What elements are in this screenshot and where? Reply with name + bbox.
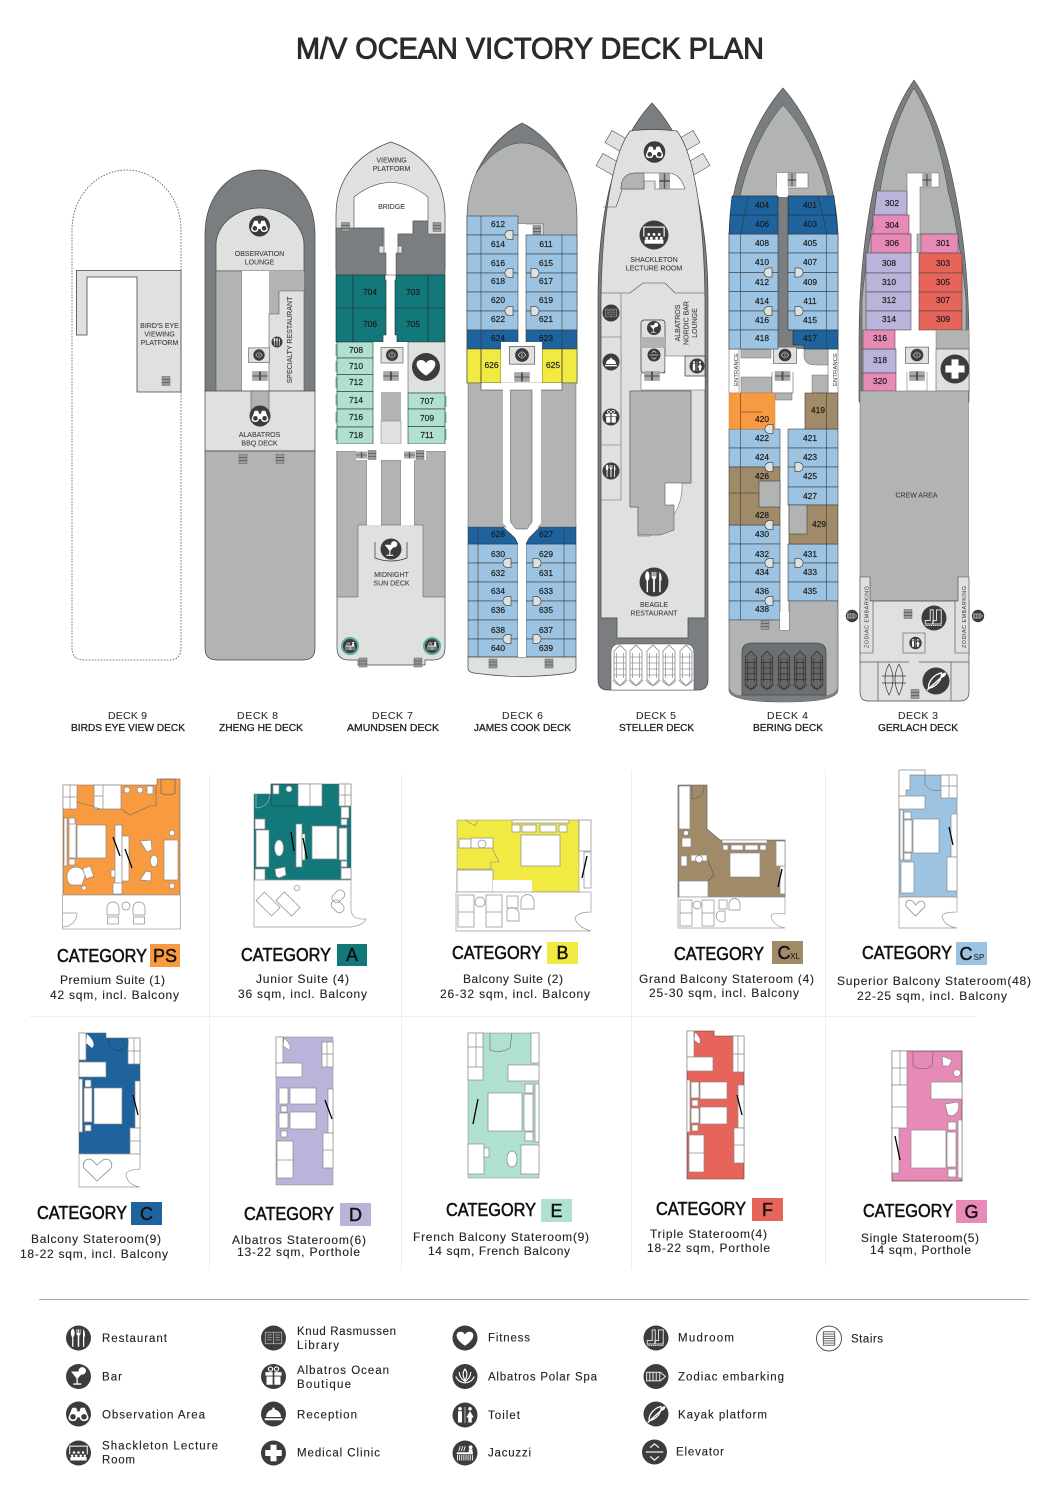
cabins: category C and B deck 6 xyxy=(467,330,577,544)
cabin numbers: deck 6: 623 xyxy=(539,333,553,343)
icon: kayak platform xyxy=(922,668,950,694)
heading: category F: CATEGORY xyxy=(656,1199,746,1219)
deck labels: DECK 8 xyxy=(237,710,278,722)
deck labels: STELLER DECK xyxy=(619,722,694,734)
panel: deck 7 plan xyxy=(336,142,446,667)
cabin numbers: deck 6: 640 xyxy=(491,643,505,653)
legend: bar xyxy=(66,1364,122,1389)
heading: category PS: CATEGORY xyxy=(57,946,147,966)
description: C SP: 22-25 sqm, incl. Balcony xyxy=(857,989,1007,1003)
description: F: Triple Stateroom(4) xyxy=(650,1227,767,1241)
legend: boutique xyxy=(261,1364,389,1391)
cabin numbers: deck 4: 411 xyxy=(803,296,817,306)
deck labels: BIRDS EYE VIEW DECK xyxy=(71,722,185,734)
panel: deck 5 plan: LOUNGE xyxy=(692,308,699,338)
description: D xyxy=(232,1233,366,1259)
legend: zodiac embarking xyxy=(644,1364,784,1389)
panel: deck 8 plan: LOUNGE xyxy=(245,259,275,266)
door markers: deck 4 xyxy=(764,268,803,606)
description: A: 36 sqm, incl. Balcony xyxy=(238,987,367,1001)
panel: category PS xyxy=(50,779,180,1002)
cabin numbers: deck 6: 624 xyxy=(491,333,505,343)
deck labels: DECK 4 xyxy=(767,710,808,722)
panel: deck 6 plan xyxy=(467,123,577,676)
icon: lecture room xyxy=(640,220,668,250)
legend: reception xyxy=(261,1402,357,1426)
icons: deck 5 side column xyxy=(602,304,620,480)
badge: G xyxy=(956,1200,987,1223)
cabins: category C XL xyxy=(729,393,838,544)
description: F: 18-22 sqm, Porthole xyxy=(647,1241,770,1255)
panel: deck 3 plan: ZODIAC EMBARKING xyxy=(864,586,870,648)
heading: category C SP: CATEGORY xyxy=(862,943,952,963)
cabin numbers: deck 4: 427 xyxy=(803,491,817,501)
cabin numbers: deck 6: 627 xyxy=(539,529,553,539)
deck labels xyxy=(71,710,958,734)
description: PS: Premium Suite (1) xyxy=(60,973,165,987)
cabin numbers: deck 3: 316 xyxy=(873,333,887,343)
cabin numbers: deck 4: 430 xyxy=(755,529,769,539)
cabin numbers: deck 3: 310 xyxy=(882,277,896,287)
cabin numbers: deck 7: 718 xyxy=(349,430,363,440)
legend: stairs: Stairs xyxy=(851,1334,883,1346)
icon: medical clinic xyxy=(940,354,970,384)
icon: restaurant xyxy=(640,568,668,596)
legend: toilet: Toilet xyxy=(488,1410,521,1422)
cabins: category C deck 4 xyxy=(729,196,838,349)
panel: category A xyxy=(238,784,367,1001)
badge: F: F xyxy=(762,1200,773,1220)
badge: B: B xyxy=(556,943,569,963)
cabin numbers: deck 3: 307 xyxy=(936,295,950,305)
legend: spa: Albatros Polar Spa xyxy=(488,1372,598,1384)
badge: PS: PS xyxy=(153,946,177,966)
floor plan: PS xyxy=(62,779,180,929)
description: C SP xyxy=(837,974,1031,1003)
panel: category C xyxy=(20,1033,168,1261)
heading: category G: CATEGORY xyxy=(863,1201,953,1221)
legend: library: Knud Rasmussen xyxy=(297,1326,396,1338)
panel: deck 8 plan: ALABATROS xyxy=(239,432,281,439)
legend: library xyxy=(261,1326,396,1352)
description: C xyxy=(20,1232,168,1261)
cabin numbers: deck 7: 711 xyxy=(420,430,434,440)
cabin numbers: deck 3: 318 xyxy=(873,355,887,365)
badge: G: G xyxy=(964,1202,979,1222)
legend: lecture room xyxy=(66,1440,218,1466)
cabins: category C superior deck 6 xyxy=(467,216,577,657)
cabin numbers: deck 6: 618 xyxy=(491,276,505,286)
cabin numbers: deck 6: 625 xyxy=(546,360,560,370)
panel: category B xyxy=(440,820,591,1001)
panel: category C SP xyxy=(837,770,1031,1003)
crew area: CREW AREA xyxy=(895,492,938,500)
panel: deck 7 plan: BRIDGE xyxy=(378,204,405,211)
cabin numbers: deck 4: 429 xyxy=(812,519,826,529)
legend: boutique: Boutique xyxy=(297,1379,351,1391)
cabin numbers: deck 4: 426 xyxy=(755,471,769,481)
kayaks xyxy=(882,664,906,695)
deck labels: DECK 3 xyxy=(898,710,938,722)
cabin numbers: deck 3: 312 xyxy=(882,295,896,305)
legend: spa xyxy=(452,1364,598,1389)
badge: D xyxy=(340,1203,371,1226)
legend: stairs xyxy=(816,1326,883,1351)
cabin numbers: deck 4: 422 xyxy=(755,433,769,443)
panel: deck 3 plan: ZODIAC EMBARKING xyxy=(962,586,968,648)
panel: deck 4 plan: ENTRANCE xyxy=(734,353,740,386)
heading: category E: CATEGORY xyxy=(446,1200,536,1220)
cabin numbers: deck 6: 631 xyxy=(539,568,553,578)
cabin numbers: deck 6: 629 xyxy=(539,549,553,559)
panel: deck 9 plan: PLATFORM xyxy=(141,340,178,347)
floor plan: A xyxy=(254,784,366,927)
lifeboats xyxy=(613,645,693,686)
description: C XL: Grand Balcony Stateroom (4) xyxy=(639,972,814,986)
deck labels: DECK 6 xyxy=(502,710,543,722)
description: E: 14 sqm, French Balcony xyxy=(428,1244,570,1258)
icon: restaurant xyxy=(272,336,282,348)
door markers: deck 6 xyxy=(503,230,541,644)
deck labels: AMUNDSEN DECK xyxy=(347,722,439,734)
cabin numbers: deck 6: 638 xyxy=(491,625,505,635)
cabin numbers: deck 6: 611 xyxy=(539,239,553,249)
cabin numbers: deck 4: 404 xyxy=(755,200,769,210)
floor plan: C XL xyxy=(678,785,785,928)
cabins: category F deck 3 xyxy=(919,253,962,330)
cabin numbers: deck 3: 303 xyxy=(936,258,950,268)
cabin numbers: deck 4: 407 xyxy=(803,257,817,267)
legend: kayak platform: Kayak platform xyxy=(678,1410,767,1422)
description: C: Balcony Stateroom(9) xyxy=(31,1232,161,1246)
cabin numbers: deck 4: 408 xyxy=(755,238,769,248)
cabin numbers: deck 4: 431 xyxy=(803,549,817,559)
legend: restaurant: Restaurant xyxy=(102,1333,168,1345)
cabin numbers: deck 3: 320 xyxy=(873,376,887,386)
cabin numbers: deck 4: 423 xyxy=(803,452,817,462)
panel: deck 7 plan: VIEWING xyxy=(376,158,407,164)
cabin numbers: deck 7: 716 xyxy=(349,412,363,422)
floor plan: C xyxy=(79,1033,140,1187)
description: A: Junior Suite (4) xyxy=(256,972,349,986)
cabin numbers: deck 6: 634 xyxy=(491,586,505,596)
badge: C SP: SP xyxy=(974,953,984,962)
legend: mudroom: Mudroom xyxy=(678,1332,734,1344)
panel: deck 4 plan: ENTRANCE xyxy=(833,353,839,386)
badge: D: D xyxy=(349,1205,362,1225)
cabins: category A xyxy=(336,275,445,342)
panel: deck 8 plan: BBQ DECK xyxy=(241,440,278,447)
cabin numbers: deck 6: 632 xyxy=(491,568,505,578)
icon: bar xyxy=(375,538,407,561)
panel: deck 7 plan: PLATFORM xyxy=(373,166,410,173)
panel: deck 3 plan xyxy=(846,80,984,701)
legend: elevator xyxy=(642,1440,724,1464)
cabin numbers: deck 7: 714 xyxy=(349,395,363,405)
panel: deck 7 plan: MIDNIGHT xyxy=(374,572,410,579)
cabin numbers: deck 3: 305 xyxy=(936,277,950,287)
panel: deck 5 plan: NORDIC BAR xyxy=(684,301,690,345)
cabin numbers: deck 6: 635 xyxy=(539,605,553,615)
description: D: Albatros Stateroom(6) xyxy=(232,1233,366,1247)
description: G: 14 sqm, Porthole xyxy=(870,1243,971,1257)
cabins: category D and G deck 3 xyxy=(863,191,958,391)
icons: zodiac embarking xyxy=(846,610,984,622)
cabin numbers: deck 4: 425 xyxy=(803,471,817,481)
panel: deck 5 plan: LECTURE ROOM xyxy=(626,265,682,272)
cabin numbers: deck 6: 636 xyxy=(491,605,505,615)
panel: deck 7 plan: SUN DECK xyxy=(373,580,410,587)
panel: deck 5 plan: RESTAURANT xyxy=(631,610,678,617)
badge: A: A xyxy=(346,945,358,965)
legend: jacuzzi: Jacuzzi xyxy=(488,1448,531,1460)
legend: lecture room: Shackleton Lecture xyxy=(102,1440,218,1452)
cabin numbers: deck 3: 314 xyxy=(882,314,896,324)
cabin numbers: deck 4: 416 xyxy=(755,315,769,325)
cabin numbers: deck 4: 433 xyxy=(803,567,817,577)
cabin numbers: deck 4: 403 xyxy=(803,219,817,229)
title: M/V OCEAN VICTORY DECK PLAN xyxy=(296,32,764,66)
description: PS xyxy=(50,973,179,1002)
heading: category C XL: CATEGORY xyxy=(674,944,764,964)
description: G: Single Stateroom(5) xyxy=(861,1231,979,1245)
cabin numbers: deck 4: 435 xyxy=(803,586,817,596)
legend: reception: Reception xyxy=(297,1410,357,1422)
panel: deck 9 plan: VIEWING xyxy=(144,331,175,338)
cabin numbers: deck 6: 621 xyxy=(539,314,553,324)
legend: fitness: Fitness xyxy=(488,1332,530,1344)
cabin numbers: deck 4: 418 xyxy=(755,333,769,343)
cabin numbers: deck 6: 616 xyxy=(491,258,505,268)
cabin numbers: deck 4: 428 xyxy=(755,510,769,520)
cabin numbers: deck 3: 306 xyxy=(885,238,899,248)
icon: bbq deck observation xyxy=(250,406,270,426)
cabin numbers: deck 6: 626 xyxy=(485,360,499,370)
panel: deck 5 plan: ALBATROS xyxy=(675,304,682,341)
cabin numbers: deck 4: 412 xyxy=(755,277,769,287)
icon: fitness xyxy=(412,353,440,381)
cabin numbers: deck 6: 639 xyxy=(539,643,553,653)
heading: category B: CATEGORY xyxy=(452,943,542,963)
panel: category G xyxy=(861,1051,987,1257)
cabin numbers: deck 7: 707 xyxy=(420,396,434,406)
panel: deck 5 plan xyxy=(596,103,710,690)
legend: medical clinic: Medical Clinic xyxy=(297,1448,380,1460)
panel: deck 8 plan: SPECIALTY RESTAURANT xyxy=(287,296,294,383)
badge: C SP xyxy=(956,942,987,965)
cabin: category PS xyxy=(729,393,775,429)
lifeboats deck 4 xyxy=(744,651,824,690)
cabin numbers: deck 4: 434 xyxy=(755,567,769,577)
deck labels: JAMES COOK DECK xyxy=(474,722,571,734)
badge: E xyxy=(541,1199,572,1222)
cabin numbers: deck 6 xyxy=(485,219,560,653)
panel: deck 5 plan: BEAGLE xyxy=(640,602,668,609)
legend: medical clinic xyxy=(261,1440,380,1466)
badge: C: C xyxy=(140,1204,153,1224)
floor plan: E xyxy=(468,1033,539,1178)
legend: lecture room: Room xyxy=(102,1454,135,1466)
heading: category A: CATEGORY xyxy=(241,945,331,965)
badge: PS xyxy=(150,944,180,967)
heading: category C: CATEGORY xyxy=(37,1203,127,1223)
badge: C xyxy=(131,1202,162,1225)
description: E xyxy=(413,1230,589,1258)
description: F xyxy=(647,1227,770,1255)
cabin numbers: deck 7: 708 xyxy=(349,345,363,355)
panel: category E xyxy=(413,1033,589,1258)
cabins: category A: 703 xyxy=(406,287,420,297)
description: B: 26-32 sqm, incl. Balcony xyxy=(440,987,590,1001)
cabins: category E xyxy=(336,342,446,444)
cabin numbers: deck 4: 436 xyxy=(755,586,769,596)
cabin numbers: deck 3: 301 xyxy=(936,238,950,248)
badge: B xyxy=(547,942,578,964)
deck labels: ZHENG HE DECK xyxy=(219,722,303,734)
panel: deck 8 plan: OBSERVATION xyxy=(235,251,284,258)
cabin numbers: deck 4: 424 xyxy=(755,452,769,462)
legend: boutique: Albatros Ocean xyxy=(297,1365,389,1377)
cabin numbers: deck 4: 409 xyxy=(803,277,817,287)
badge: C XL: XL xyxy=(790,952,800,961)
floor plan: F xyxy=(687,1031,744,1179)
panel: deck 9 plan: BIRD'S EYE xyxy=(140,323,179,330)
cabin numbers: deck 6: 630 xyxy=(491,549,505,559)
cabin numbers: deck 6: 612 xyxy=(491,219,505,229)
cabin numbers: deck 3: 304 xyxy=(885,220,899,230)
panel: category D xyxy=(232,1037,371,1259)
badge: C XL: C xyxy=(778,943,790,963)
cabin numbers: deck 4: 432 xyxy=(755,549,769,559)
cabin numbers: deck 7: 712 xyxy=(349,377,363,387)
description: A xyxy=(238,972,367,1001)
legend: observation area: Observation Area xyxy=(102,1410,206,1422)
panel: category F xyxy=(647,1031,783,1255)
legend: restaurant xyxy=(66,1326,168,1350)
panel: deck 5 plan: SHACKLETON xyxy=(630,257,678,264)
cabins: category C superior deck 4 xyxy=(729,234,838,620)
icon: observation xyxy=(644,141,665,163)
description: B xyxy=(440,972,590,1001)
cabin numbers: deck 3: 308 xyxy=(882,258,896,268)
description: G xyxy=(861,1231,979,1257)
cabin numbers: deck 4: 417 xyxy=(803,333,817,343)
cabin numbers: deck 4: 410 xyxy=(755,257,769,267)
panel: deck 8 plan xyxy=(205,170,315,660)
badge: F xyxy=(752,1198,783,1221)
cabin numbers: deck 6: 617 xyxy=(539,276,553,286)
cabin numbers: deck 4 xyxy=(755,200,826,614)
cabins: category A: 705 xyxy=(406,319,420,329)
cabin numbers: deck 6: 637 xyxy=(539,625,553,635)
legend xyxy=(66,1326,883,1466)
icon: toilet xyxy=(903,633,925,653)
legend: kayak platform xyxy=(644,1402,767,1426)
cabin numbers: deck 4: 419 xyxy=(811,405,825,415)
legend: mudroom xyxy=(644,1326,734,1350)
cabin numbers: deck 3: 309 xyxy=(936,314,950,324)
deck labels: GERLACH DECK xyxy=(878,722,958,734)
legend: observation area xyxy=(66,1402,206,1426)
cabin numbers: deck 7 xyxy=(349,345,434,440)
description: C XL: 25-30 sqm, incl. Balcony xyxy=(649,986,799,1000)
deck labels: DECK 7 xyxy=(372,710,413,722)
cabin numbers: deck 4: 420 xyxy=(755,414,769,424)
cabins: category A: 704 xyxy=(363,287,377,297)
cabin numbers: deck 4: 401 xyxy=(803,200,817,210)
deck labels: DECK 5 xyxy=(636,710,676,722)
description: C SP: Superior Balcony Stateroom(48) xyxy=(837,974,1031,988)
floor plan: C SP xyxy=(899,770,957,928)
heading: category D: CATEGORY xyxy=(244,1204,334,1224)
badge: E: E xyxy=(550,1201,563,1221)
cabin numbers: deck 4: 421 xyxy=(803,433,817,443)
cabin numbers: deck 7: 710 xyxy=(349,361,363,371)
description: D: 13-22 sqm, Porthole xyxy=(237,1245,360,1259)
cabin numbers: deck 6: 620 xyxy=(491,295,505,305)
cabin numbers: deck 6: 614 xyxy=(491,239,505,249)
cabin numbers: deck 6: 615 xyxy=(539,258,553,268)
floor plan: D xyxy=(276,1037,333,1185)
legend: library: Library xyxy=(297,1340,339,1352)
description: PS: 42 sqm, incl. Balcony xyxy=(50,988,179,1002)
cabin numbers: deck 6: 628 xyxy=(491,529,505,539)
legend: toilet xyxy=(452,1402,521,1428)
bar and elevator core xyxy=(641,320,665,373)
deck labels: BERING DECK xyxy=(753,722,823,734)
description: B: Balcony Suite (2) xyxy=(463,972,563,986)
panel: category C XL xyxy=(639,785,814,1000)
cabin numbers: deck 3: 302 xyxy=(885,198,899,208)
legend: bar: Bar xyxy=(102,1372,122,1384)
cabin numbers: deck 4: 406 xyxy=(755,219,769,229)
icons: jacuzzi xyxy=(341,637,441,655)
description: C XL xyxy=(639,972,814,1000)
legend: jacuzzi xyxy=(452,1440,531,1466)
legend: elevator: Elevator xyxy=(676,1446,724,1458)
description: C: 18-22 sqm, incl. Balcony xyxy=(20,1247,168,1261)
cabin numbers: deck 4: 415 xyxy=(803,315,817,325)
floor plan: G xyxy=(892,1051,962,1181)
cabin numbers: deck 4: 414 xyxy=(755,296,769,306)
cabin numbers: deck 3 xyxy=(873,198,950,386)
cabin numbers: deck 7: 709 xyxy=(420,413,434,423)
cabin numbers: deck 6: 622 xyxy=(491,314,505,324)
badge: A xyxy=(337,944,367,966)
floor plan: B xyxy=(456,820,591,931)
panel: deck 9 plan xyxy=(72,170,181,660)
icon: mudroom xyxy=(922,606,946,630)
badge: C XL xyxy=(772,941,803,964)
legend: zodiac embarking: Zodiac embarking xyxy=(678,1372,784,1384)
legend: fitness xyxy=(452,1326,530,1350)
badge: C SP: C xyxy=(960,944,972,964)
panel: deck 4 plan xyxy=(729,88,839,702)
description: E: French Balcony Stateroom(9) xyxy=(413,1230,589,1244)
crew area xyxy=(860,391,968,601)
cabins: category A: 706 xyxy=(363,319,377,329)
cabin numbers: deck 6: 619 xyxy=(539,295,553,305)
cabin numbers: deck 4: 438 xyxy=(755,604,769,614)
icon: observation lounge xyxy=(249,216,270,236)
deck labels: DECK 9 xyxy=(108,710,147,722)
cabin numbers: deck 4: 405 xyxy=(803,238,817,248)
cabin numbers: deck 6: 633 xyxy=(539,586,553,596)
